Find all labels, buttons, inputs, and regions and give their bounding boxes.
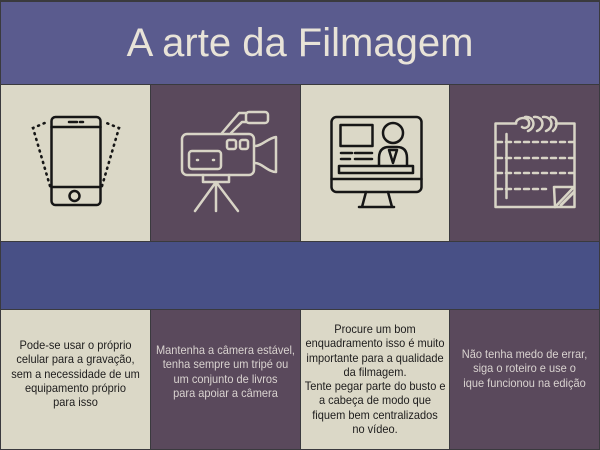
text: editing tip: Não tenha medo de errar, <box>462 348 587 361</box>
text: phone tip: equipamento próprio <box>25 382 126 395</box>
header banner <box>1 2 599 84</box>
icon: presenter on monitor <box>330 116 423 208</box>
text: framing tip: Tente pegar parte do busto e <box>305 380 446 393</box>
text: framing tip: no vídeo. <box>352 423 398 436</box>
title: A arte da Filmagem <box>127 21 473 65</box>
text: camera tip <box>156 344 295 400</box>
panel: editing tip <box>450 310 599 449</box>
text: framing tip <box>305 323 446 436</box>
text: camera tip: para apoiar a câmera <box>173 387 278 400</box>
text: framing tip: enquadramento isso é muito <box>306 337 444 350</box>
text: framing tip: da filmagem. <box>343 366 407 379</box>
panel: framing tip <box>301 310 449 449</box>
text: phone tip: Pode-se usar o próprio <box>19 339 132 352</box>
panel: monitor icon <box>301 85 449 241</box>
panel: camera tip <box>151 310 300 449</box>
middle band <box>1 242 599 309</box>
text: framing tip: fiquem bem centralizados <box>312 409 438 422</box>
text: phone tip: celular para a gravação, <box>16 353 135 366</box>
text: framing tip: importante para a qualidade <box>306 352 444 365</box>
text: editing tip <box>462 348 587 390</box>
text: phone tip <box>11 339 140 409</box>
icon: video camera on tripod <box>180 110 278 212</box>
panel: phone tip <box>1 310 150 449</box>
panel: camera icon <box>151 85 300 241</box>
icon: smartphone <box>32 116 121 206</box>
text: phone tip: sem a necessidade de um <box>11 368 140 381</box>
text: editing tip: ique funcionou na edição <box>463 377 586 390</box>
text: camera tip: tenha sempre um tripé ou <box>163 358 288 371</box>
text: framing tip: Procure um bom <box>334 323 416 336</box>
text: framing tip: a cabeça de modo que <box>319 394 431 407</box>
panel: notepad icon <box>450 85 599 241</box>
text: phone tip: para isso <box>53 396 98 409</box>
text: camera tip: um conjunto de livros <box>173 373 278 386</box>
panel: phone icon <box>1 85 150 241</box>
text: camera tip: Mantenha a câmera estável, <box>156 344 295 357</box>
text: editing tip: siga o roteiro e use o <box>473 362 576 375</box>
icon: notepad <box>494 116 576 208</box>
